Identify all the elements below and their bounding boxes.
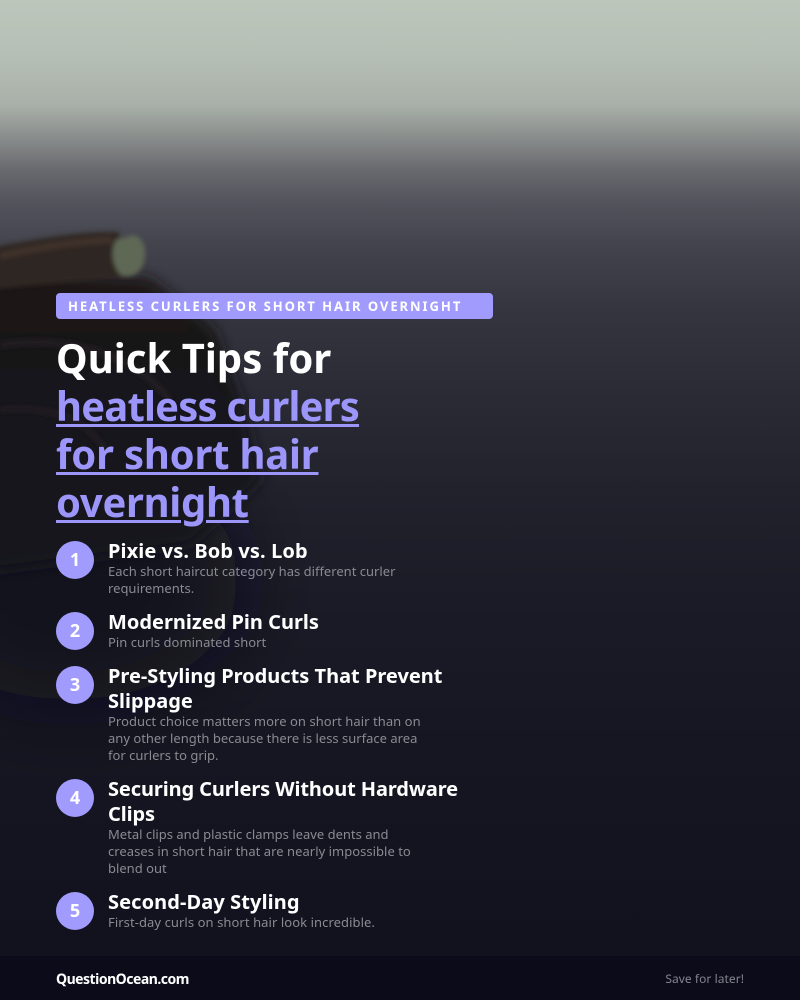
tip 3 bbox=[56, 662, 442, 764]
tip 4 bbox=[56, 775, 458, 877]
tip 3: any other length because there is less surface area bbox=[108, 729, 417, 747]
tip 4: blend out bbox=[108, 859, 167, 877]
tip 4: Securing Curlers Without Hardware bbox=[108, 775, 458, 802]
tip 4: Clips bbox=[108, 800, 155, 827]
tip 1: Pixie vs. Bob vs. Lob bbox=[108, 537, 308, 564]
footer bar bbox=[0, 956, 800, 1000]
tip 4: Metal clips and plastic clamps leave dents and bbox=[108, 825, 389, 843]
tip 2: Pin curls dominated short bbox=[108, 633, 266, 651]
tip 2: Modernized Pin Curls bbox=[108, 608, 319, 635]
tip 1: 1 bbox=[70, 548, 80, 572]
title: Quick Tips for bbox=[56, 330, 331, 385]
tip 3: 3 bbox=[70, 673, 80, 697]
tip 3: Product choice matters more on short hair than on bbox=[108, 712, 421, 730]
tip 5: First-day curls on short hair look incredible. bbox=[108, 913, 375, 931]
tip 3: Slippage bbox=[108, 687, 193, 714]
tip 1 bbox=[56, 537, 396, 597]
tip 2 bbox=[56, 608, 319, 651]
tip 1: Each short haircut category has different curler bbox=[108, 562, 395, 580]
tip 3: Pre-Styling Products That Prevent bbox=[108, 662, 442, 689]
tip 5: Second-Day Styling bbox=[108, 888, 300, 915]
tip 3: for curlers to grip. bbox=[108, 746, 219, 764]
tip 4: 4 bbox=[70, 786, 80, 810]
title: heatless curlers bbox=[56, 378, 359, 433]
title: overnight bbox=[56, 474, 249, 529]
tip 4: creases in short hair that are nearly impossible to bbox=[108, 842, 411, 860]
tag badge bbox=[56, 293, 493, 319]
tip 1: requirements. bbox=[108, 579, 194, 597]
tip 2: 2 bbox=[70, 619, 80, 643]
tip 5: 5 bbox=[70, 899, 80, 923]
tag badge: HEATLESS CURLERS FOR SHORT HAIR OVERNIGHT bbox=[68, 297, 462, 315]
tip 5 bbox=[56, 888, 375, 931]
title bbox=[56, 330, 360, 529]
title: for short hair bbox=[56, 426, 318, 481]
footer note: Save for later! bbox=[665, 970, 744, 987]
footer brand: QuestionOcean.com bbox=[56, 970, 189, 989]
lower hair fade bbox=[0, 460, 240, 700]
